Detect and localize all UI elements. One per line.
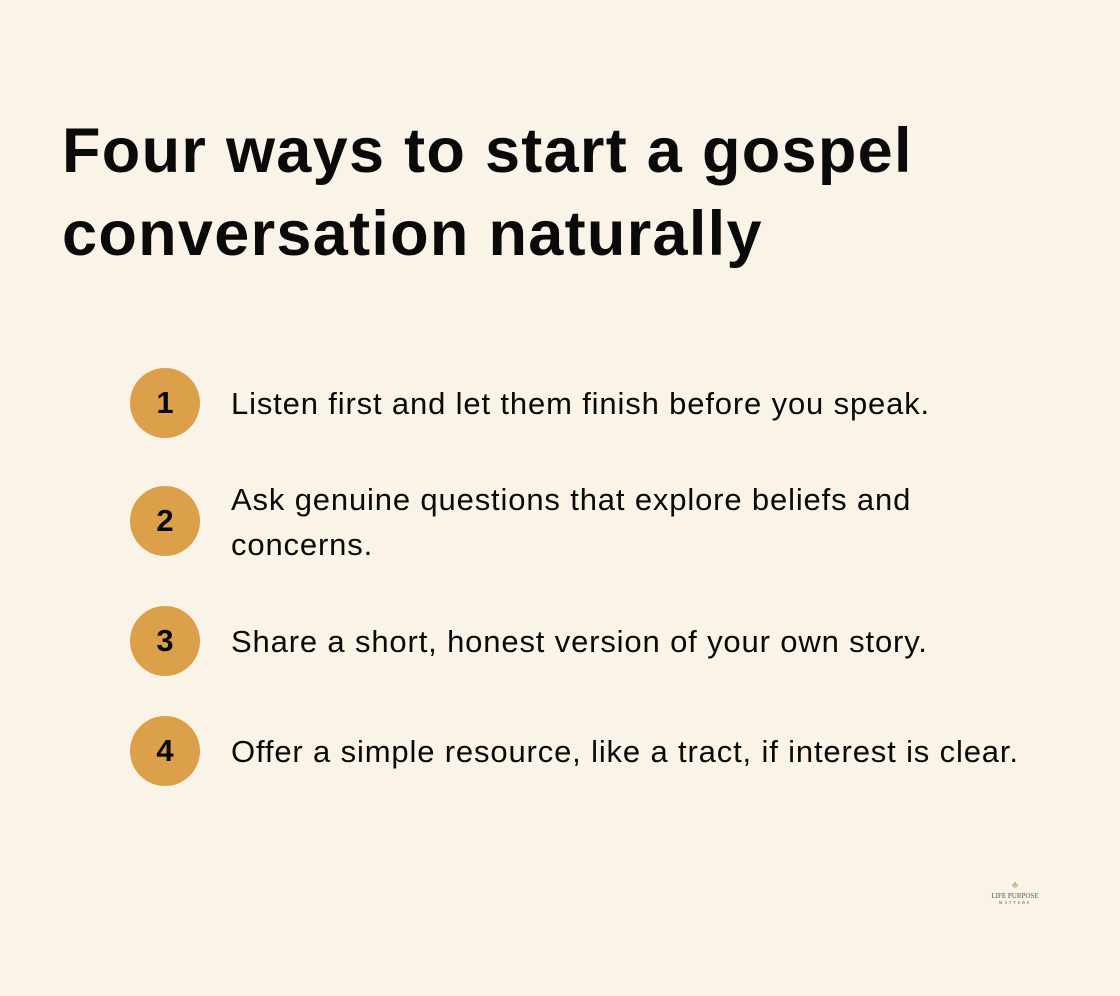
logo: MATTERS (999, 900, 1031, 905)
logo (991, 880, 1039, 905)
item 1: Listen first and let them finish before you speak. (231, 386, 930, 421)
title: conversation naturally (62, 199, 763, 269)
item 4: 4 (156, 733, 174, 768)
item 3: 3 (156, 623, 174, 658)
item 3 (130, 606, 928, 676)
logo: LIFE PURPOSE (991, 892, 1039, 900)
item 2: Ask genuine questions that explore beliefs and concerns. (231, 482, 911, 562)
title (62, 116, 913, 269)
title: Four ways to start a gospel (62, 116, 913, 186)
item 3: Share a short, honest version of your own story. (231, 624, 928, 659)
item 2: 2 (156, 503, 174, 538)
item 4: Offer a simple resource, like a tract, if interest is clear. (231, 734, 1019, 769)
logo: ♣ (1012, 880, 1018, 891)
item 1 (130, 368, 930, 438)
item 4 (130, 716, 1019, 786)
item 1: 1 (156, 385, 174, 420)
